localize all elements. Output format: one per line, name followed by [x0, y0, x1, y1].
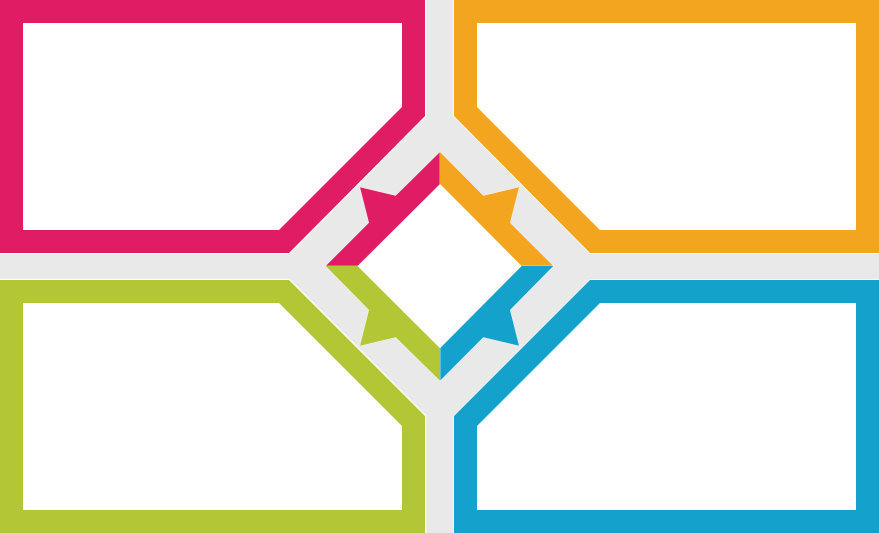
panel: pink frame top left — [0, 0, 425, 253]
arrow: pink — [326, 152, 440, 266]
arrow: blue — [440, 266, 553, 381]
center diamond — [358, 184, 522, 348]
arrow: orange — [440, 152, 553, 266]
panel: blue frame bottom right — [454, 280, 879, 533]
panel: orange frame top right — [454, 0, 879, 253]
panel: green frame bottom left — [0, 280, 425, 533]
arrow: green — [326, 266, 440, 381]
